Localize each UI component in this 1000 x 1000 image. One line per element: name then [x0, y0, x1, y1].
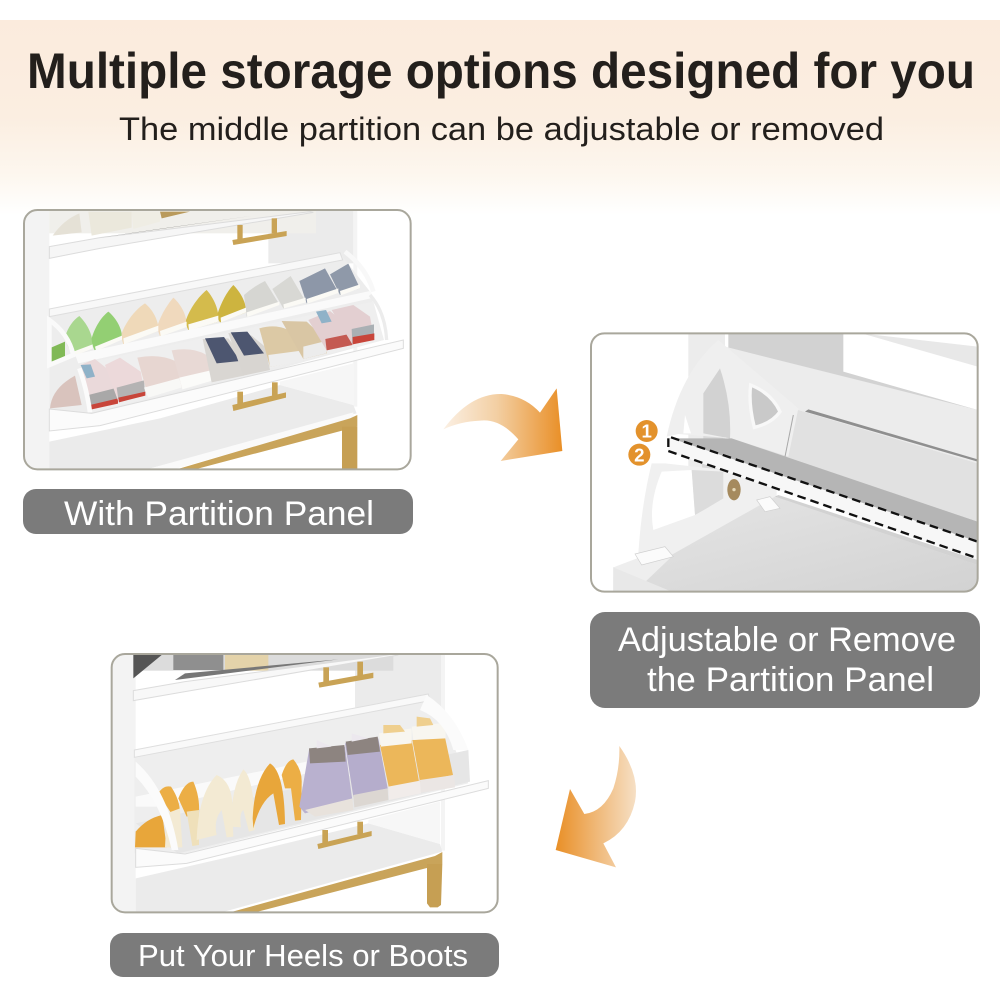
label: adjustable or remove: [590, 612, 980, 708]
lilac boots: [299, 733, 388, 817]
arrow: right: [443, 388, 562, 461]
panel: shoe rack with partition panel: [24, 210, 411, 469]
gold handles: [232, 218, 287, 411]
dashed partition outline: [668, 437, 978, 558]
label: heels or boots: [110, 933, 499, 977]
heels: [135, 759, 302, 847]
label: heels or boots: Put Your Heels or Boots: [138, 938, 468, 973]
label: adjustable or remove: the Partition Panel: [647, 661, 934, 699]
label: adjustable or remove: Adjustable or Remove: [618, 621, 956, 659]
white partition strip: [670, 438, 977, 543]
curved bracket: [667, 340, 798, 457]
yellow boots: [379, 717, 455, 800]
arrow: down-left: [556, 746, 636, 867]
number 2 badge: 2: [634, 444, 645, 465]
title: Multiple storage options designed for you: [27, 43, 975, 99]
shoe soles: [73, 284, 360, 356]
panel: rack with heels and boots: [112, 654, 498, 912]
gold base frame: [177, 415, 357, 469]
number 1 badge: [636, 420, 658, 442]
upper shoe row: [49, 264, 360, 366]
gold handles: [317, 662, 373, 849]
subtitle: The middle partition can be adjustable or removed: [119, 111, 884, 147]
label: with partition panel: With Partition Panel: [64, 495, 374, 533]
number 1 badge: 1: [641, 421, 652, 442]
brass screw: [727, 479, 741, 500]
panel: partition panel adjustment detail: [591, 333, 978, 592]
gold base frame: [230, 852, 442, 912]
header band: [0, 20, 1000, 215]
lower shoe row: [50, 305, 374, 410]
number 2 badge: [628, 444, 650, 466]
label: with partition panel: [23, 489, 413, 534]
gray slot: [668, 438, 978, 543]
bracket clips: [635, 497, 780, 565]
